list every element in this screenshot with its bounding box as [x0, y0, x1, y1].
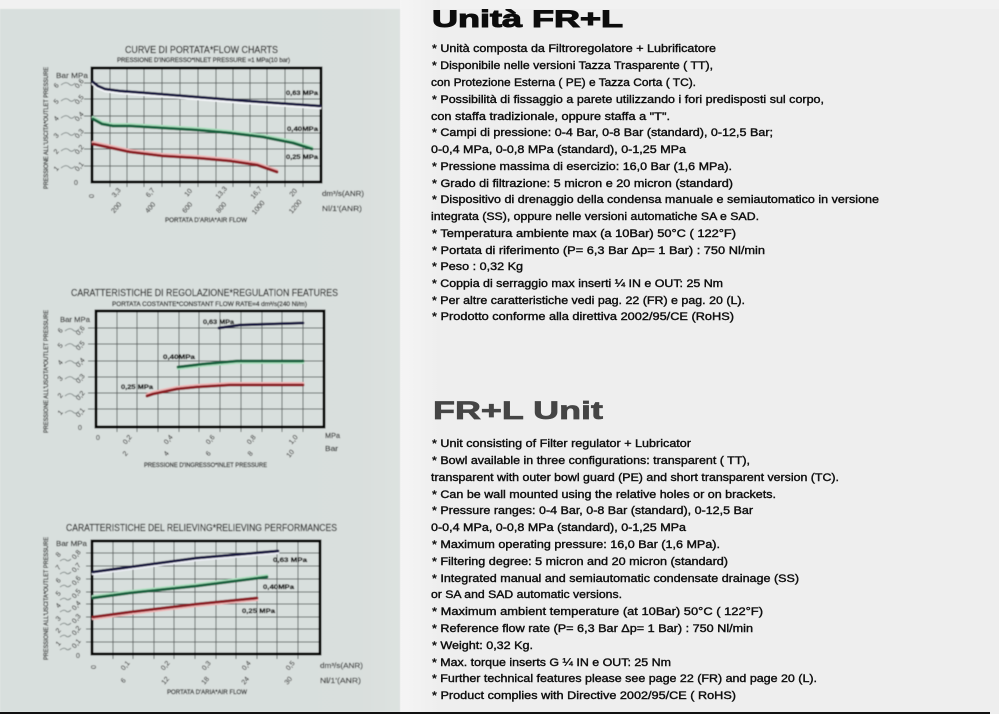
x axis ticks: 0,4 [163, 434, 175, 446]
y axis ticks [57, 325, 87, 432]
y axis ticks: 6 [53, 82, 61, 90]
x axis ticks: 1,0 [288, 434, 300, 446]
x axis ticks: 1200 [288, 199, 304, 215]
curve label: 0,63 MPa: 0,63 MPa [273, 558, 308, 564]
x axis title: PORTATA D'ARIA*AIR FLOW [165, 218, 247, 224]
x axis ticks: 1000 [251, 200, 267, 216]
text block: Italian specifications: * Unità composta da Filtroregolatore + Lubrificatore [432, 43, 716, 55]
y axis ticks: 0,1 [74, 161, 86, 173]
y axis ticks: 0,4 [74, 111, 86, 123]
x axis ticks: 0,6 [205, 434, 217, 446]
x axis ticks: 8 [247, 450, 255, 458]
y axis ticks: 3 [57, 375, 65, 383]
text block: English specifications: * Weight: 0,32 Kg. [432, 640, 533, 652]
text block: English specifications: * Reference flow rate (P= 6,3 Bar Δp= 1 Bar) : 750 Nl/min [432, 623, 753, 635]
x axis ticks: 0,4 [241, 660, 253, 672]
y axis ticks: 0,4 [75, 357, 87, 369]
x axis units: Nl/1'(ANR) [320, 676, 362, 685]
x axis ticks: 800 [215, 201, 228, 215]
x axis ticks: 0,3 [201, 660, 213, 672]
y axis ticks: 0,5 [71, 588, 83, 600]
y axis ticks: 0,8 [71, 549, 83, 561]
x axis ticks: 24 [241, 676, 251, 686]
text block: Italian specifications: * Disponibile nelle versioni Tazza Trasparente ( TT), [432, 60, 713, 72]
x axis ticks: 4 [163, 450, 171, 458]
y axis ticks: 6 [55, 577, 63, 585]
chart title: flow charts: CURVE DI PORTATA*FLOW CHARTS [125, 45, 278, 56]
text block: Italian specifications: * Pressione massima di esercizio: 16,0 Bar (1,6 MPa). [432, 161, 732, 173]
text block: Italian specifications: * Grado di filtrazione: 5 micron e 20 micron (standard) [432, 178, 733, 190]
y axis ticks: 0,2 [71, 625, 83, 637]
text block: English specifications: * Product complies with Directive 2002/95/CE ( RoHS) [432, 690, 736, 702]
y axis ticks: 1 [55, 640, 63, 648]
y axis ticks: 0,5 [75, 340, 87, 352]
x axis ticks: 13,3 [215, 185, 229, 201]
x axis ticks: 400 [144, 201, 157, 215]
curve: 0,40 MPa [93, 117, 312, 149]
x axis ticks: 0 [89, 194, 96, 198]
y axis ticks: 5 [55, 590, 63, 598]
x axis ticks [91, 660, 297, 686]
text block: English specifications: * Filtering degree: 5 micron and 20 micron (standard) [432, 556, 728, 568]
text block: English specifications: * Maximum ambient temperature (at 10Bar) 50°C ( 122°F) [432, 606, 763, 618]
x axis ticks: 0 [91, 665, 98, 669]
x axis ticks: 10 [286, 449, 296, 459]
text block: English specifications: or SA and SAD automatic versions. [431, 589, 622, 601]
curve: 0,63 MPa [93, 82, 320, 108]
x axis ticks: 600 [181, 201, 194, 215]
text block: Italian specifications: * Prodotto conforme alla direttiva 2002/95/CE (RoHS) [432, 311, 734, 323]
y axis ticks: 0,3 [75, 373, 87, 385]
x axis ticks: 3,3 [111, 187, 123, 199]
chart subtitle: constant flow rate: PORTATA COSTANTE*CONSTANT FLOW RATE=4 dm³/s(240 Nl/m) [112, 302, 307, 308]
curve label: 0,40 MPa: 0,40MPa [163, 355, 196, 361]
y axis ticks: 7 [55, 564, 63, 572]
x axis ticks: 0,8 [246, 434, 258, 446]
x axis ticks: 10 [184, 188, 194, 198]
y axis ticks: 1 [53, 165, 61, 173]
y axis title: PRESSIONE ALL'USCITA*OUTLET PRESSURE [44, 537, 50, 660]
x axis ticks: 18 [201, 676, 211, 686]
heading: Unità FR+L: Unità FR+L [432, 6, 623, 33]
y axis ticks: 2 [55, 627, 63, 635]
heading: FR+L Unit: FR+L Unit [433, 397, 604, 425]
x axis ticks: 6,7 [145, 187, 157, 199]
y axis ticks: 0 [78, 425, 82, 432]
text block: English specifications: * Max. torque inserts G ¼ IN e OUT: 25 Nm [432, 657, 671, 669]
text block: Italian specifications: * Temperatura ambiente max (a 10Bar) 50°C ( 122°F) [432, 228, 736, 240]
x axis units [322, 189, 365, 213]
y axis ticks [53, 78, 86, 187]
x axis units [320, 661, 364, 685]
x axis ticks: 0 [96, 435, 100, 442]
text block: English specifications: * Can be wall mounted using the relative holes or on brackets. [432, 489, 776, 501]
y axis ticks: 0,4 [71, 600, 83, 612]
x axis ticks: 2 [122, 450, 130, 458]
x axis ticks: 16,7 [250, 185, 264, 201]
text block: English specifications: * Further technical features please see page 22 (FR) and page 20 (L). [432, 673, 817, 685]
x axis ticks: 0,5 [285, 660, 297, 672]
plot grid and frame [84, 68, 321, 187]
text block: Italian specifications: * Possibilità di fissaggio a parete utilizzando i fori predisposti sul corpo, [432, 94, 824, 106]
y axis ticks: 0,6 [71, 575, 83, 587]
x axis units: dm³/s(ANR) [322, 189, 365, 198]
curve: 0,25 MPa [93, 142, 277, 172]
y axis units: Bar MPa [56, 539, 88, 548]
y axis title: PRESSIONE ALL'USCITA*OUTLET PRESSURE [44, 310, 50, 433]
panel: charts [0, 9, 400, 712]
plot grid and frame [86, 541, 320, 659]
y axis units: Bar MPa [60, 315, 91, 324]
x axis ticks: 20 [289, 188, 299, 198]
text block: Italian specifications [431, 43, 879, 323]
x axis units: MPa [325, 431, 341, 440]
text block: Italian specifications: con Protezione Esterna ( PE) e Tazza Corta ( TC). [431, 77, 696, 89]
chart subtitle: inlet pressure: PRESSIONE D'INGRESSO*INLET PRESSURE =1 MPa(10 bar) [117, 58, 290, 64]
y axis ticks: 0,1 [71, 638, 83, 650]
text block: Italian specifications: 0-0,4 MPa, 0-0,8 MPa (standard), 0-1,25 MPa [431, 144, 687, 156]
curve label: 0,25 MPa: 0,25 MPa [242, 609, 276, 615]
x axis ticks: 0,2 [160, 660, 172, 672]
curve: 0,63 MPa [93, 551, 278, 574]
y axis ticks: 4 [57, 359, 65, 367]
curve: 0,40 MPa [178, 361, 303, 368]
y axis ticks: 4 [53, 115, 61, 123]
y axis ticks: 3 [53, 132, 61, 140]
chart title: regulation features: CARATTERISTICHE DI REGOLAZIONE*REGULATION FEATURES [71, 288, 338, 299]
x axis ticks: 30 [284, 676, 294, 686]
text block: Italian specifications: * Per altre caratteristiche vedi pag. 22 (FR) e pag. 20 (L). [432, 295, 745, 307]
chart: flow charts [44, 45, 365, 224]
y axis ticks: 0,2 [74, 144, 86, 156]
text block: Italian specifications: * Portata di riferimento (P= 6,3 Bar Δp= 1 Bar) : 750 Nl/min [432, 245, 765, 257]
text block: English specifications: 0-0,4 MPa, 0-0,8 MPa (standard), 0-1,25 MPa [431, 522, 687, 534]
y axis ticks: 0,3 [74, 128, 86, 140]
text block: Italian specifications: integrata (SS), oppure nelle versioni automatiche SA e SAD. [431, 211, 759, 223]
curve label: 0,63 MPa: 0,63 MPa [286, 91, 319, 97]
text block: English specifications [431, 438, 839, 702]
x axis ticks: 12 [161, 676, 171, 686]
x axis ticks: 6 [205, 450, 213, 458]
curve: 0,63 MPa [219, 323, 303, 328]
x axis units: Bar [325, 444, 339, 453]
x axis ticks [96, 434, 300, 459]
text block: Italian specifications: * Dispositivo di drenaggio della condensa manuale e semiautomatico in versione [432, 194, 879, 206]
y axis ticks: 0,6 [74, 78, 86, 90]
curve: 0,25 MPa [147, 383, 303, 396]
y axis ticks: 2 [53, 148, 61, 156]
x axis units [325, 431, 341, 453]
text block: Italian specifications: con staffa tradizionale, oppure staffa a "T". [431, 111, 670, 123]
curve label: 0,40 MPa: 0,40MPa [263, 585, 295, 591]
y axis ticks: 0,1 [75, 407, 87, 419]
y axis ticks: 0 [76, 653, 80, 660]
chart: regulation features [44, 288, 341, 469]
y axis ticks: 6 [57, 327, 65, 335]
y axis ticks [55, 549, 83, 660]
y axis ticks: 0,3 [71, 613, 83, 625]
y axis title: PRESSIONE ALL'USCITA*OUTLET PRESSURE [44, 67, 50, 189]
chart title: relieving performances: CARATTERISTICHE DEL RELIEVING*RELIEVING PERFORMANCES [66, 523, 337, 534]
x axis ticks: 0,2 [122, 434, 134, 446]
text block: English specifications: * Bowl available in three configurations: transparent ( TT), [432, 455, 750, 467]
x axis units: Nl/1'(ANR) [322, 204, 363, 213]
text block: English specifications: transparent with outer bowl guard (PE) and short transparent version (TC). [431, 472, 839, 484]
y axis ticks: 0,2 [75, 390, 87, 402]
text block: English specifications: * Pressure ranges: 0-4 Bar, 0-8 Bar (standard), 0-12,5 Bar [432, 505, 753, 517]
curve label: 0,63 MPa: 0,63 MPa [203, 320, 235, 326]
text block: Italian specifications: * Campi di pressione: 0-4 Bar, 0-8 Bar (standard), 0-12,5 Bar; [432, 127, 773, 139]
y axis ticks: 1 [57, 409, 65, 417]
curve label: 0,25 MPa: 0,25 MPa [121, 385, 154, 391]
x axis ticks: 0,1 [120, 660, 132, 672]
y axis ticks: 0,5 [74, 94, 86, 106]
chart: relieving performances [44, 523, 364, 696]
curve label: 0,25 MPa: 0,25 MPa [286, 155, 319, 161]
text block: English specifications: * Integrated manual and semiautomatic condensate drainage (SS) [432, 573, 799, 585]
x axis title: PORTATA D'ARIA*AIR FLOW [167, 690, 247, 696]
y axis ticks: 8 [55, 551, 63, 559]
x axis ticks: 6 [120, 677, 128, 685]
y axis ticks: 2 [57, 392, 65, 400]
y axis ticks: 5 [53, 98, 61, 106]
plot grid and frame [88, 311, 324, 432]
y axis ticks: 4 [55, 602, 63, 610]
text block: English specifications: * Unit consisting of Filter regulator + Lubricator [432, 438, 691, 450]
y axis ticks: 3 [55, 615, 63, 623]
y axis units: Bar MPa [56, 71, 89, 80]
y axis ticks: 0,6 [75, 325, 87, 337]
x axis ticks: 200 [110, 201, 123, 215]
text block: English specifications: * Maximum operating pressure: 16,0 Bar (1,6 MPa). [432, 539, 720, 551]
curve: 0,40 MPa [93, 576, 267, 598]
curve: 0,25 MPa [93, 598, 257, 619]
x axis units: dm³/s(ANR) [320, 661, 364, 670]
curve label: 0,40 MPa: 0,40MPa [287, 127, 319, 133]
y axis ticks: 0,7 [71, 562, 83, 574]
x axis title: PRESSIONE D'INGRESSO*INLET PRESSURE [144, 463, 267, 469]
x axis ticks [89, 185, 304, 216]
y axis ticks: 5 [57, 342, 65, 350]
y axis ticks: 0 [74, 180, 78, 187]
text block: Italian specifications: * Peso : 0,32 Kg [432, 261, 523, 273]
text block: Italian specifications: * Coppia di serraggio max inserti ¼ IN e OUT: 25 Nm [432, 278, 723, 290]
